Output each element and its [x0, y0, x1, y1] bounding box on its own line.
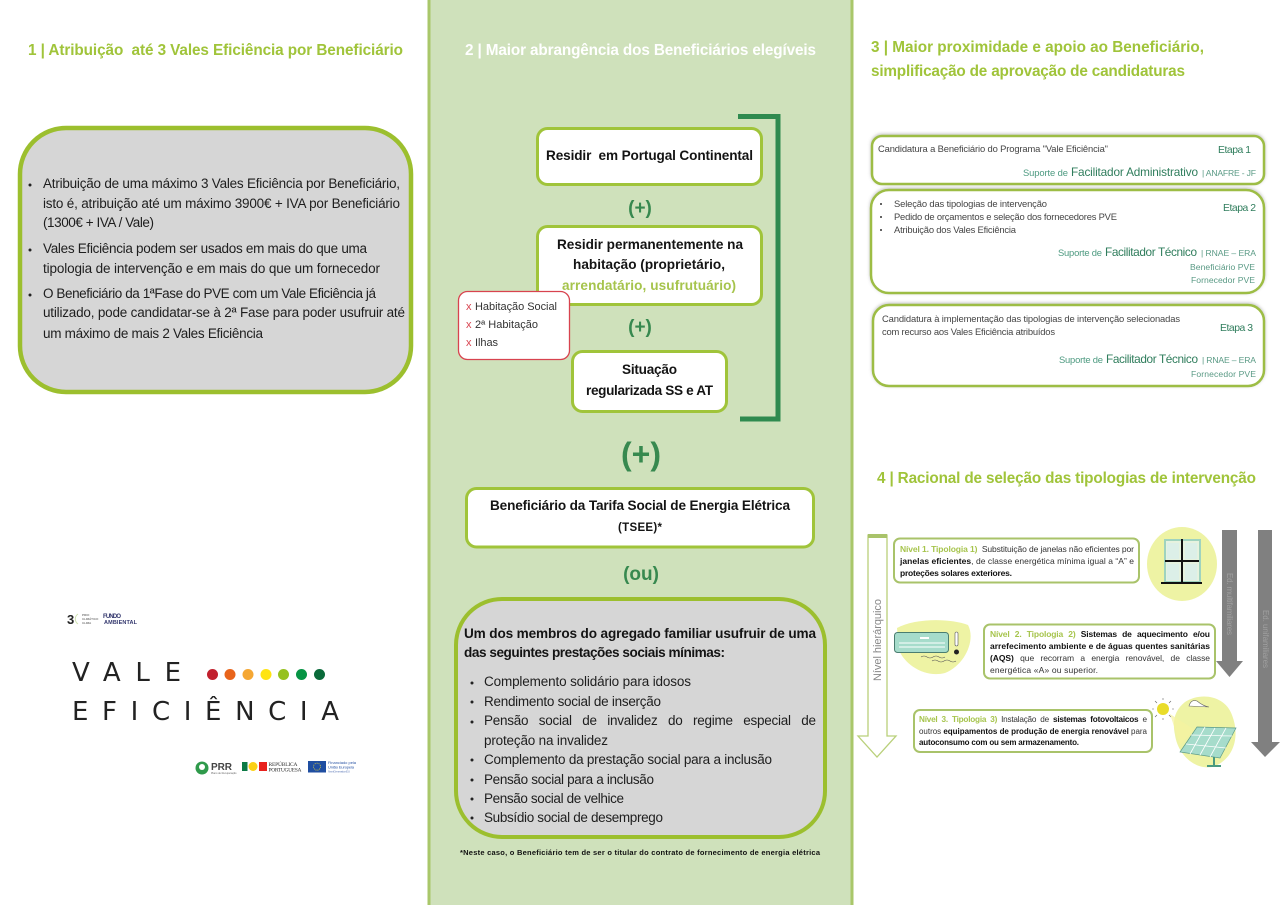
panel: step 1: Facilitador Administrativo [1071, 165, 1198, 179]
panel: level 2 heating: Nível 2. Tipologia 2) Sistemas de aquecimento e/ou [990, 629, 1210, 639]
panel: social benefits: Rendimento social de inserção [484, 694, 661, 709]
criterion: permanent residence: Residir permanentemente na [557, 237, 743, 252]
panel: social benefits: Subsídio social de desemprego [484, 810, 663, 825]
arrow: single-family buildings: Ed. unifamiliares [1261, 610, 1270, 668]
panel: step 2: Seleção das tipologias de intervenção [894, 198, 1047, 209]
panel: step 3: Facilitador Técnico [1106, 352, 1198, 366]
panel: step 2: Facilitador Técnico [1105, 245, 1197, 259]
panel: step 3: Etapa 3 [1220, 323, 1253, 334]
panel: step 1 [872, 136, 1264, 184]
callout: exclusions: Ilhas [475, 337, 498, 349]
panel: level 2 heating [984, 624, 1215, 678]
logo: PRR, República Portuguesa, União Europeia [196, 760, 357, 775]
criterion: regular situation: regularizada SS e AT [586, 383, 714, 398]
criterion: regular situation [572, 352, 726, 412]
panel: social benefits: das seguintes prestações sociais mínimas: [464, 645, 725, 660]
panel: attribution bullets: Vales Eficiência podem ser usados em mais do que uma [43, 241, 367, 256]
callout: exclusions [458, 292, 570, 360]
panel: step 2: | RNAE – ERA [1201, 248, 1256, 258]
panel: attribution bullets: um máximo de mais 2 Vales Eficiência [43, 326, 263, 341]
panel: level 3 solar [914, 710, 1152, 752]
logo: PRR, República Portuguesa, União Europeia: Plano de Recuperação [211, 772, 237, 775]
plus sign: (+) [628, 317, 652, 338]
panel: step 1: Suporte de [1023, 167, 1068, 178]
callout: exclusions: x [466, 319, 472, 331]
arrow: hierarchy level: Nível hierárquico [872, 599, 884, 681]
panel: level 1 windows: Nível 1. Tipologia 1) Substituição de janelas não eficientes por [900, 544, 1134, 554]
icon: air conditioner [894, 620, 971, 674]
panel: step 2 [871, 190, 1264, 293]
logo: PRR, República Portuguesa, União Europeia: PORTUGUESA [268, 768, 302, 774]
panel: step 2: Fornecedor PVE [1191, 275, 1255, 285]
panel: social benefits: Complemento solidário para idosos [484, 674, 691, 689]
callout: exclusions: Habitação Social [475, 301, 557, 313]
panel: attribution bullets: O Beneficiário da 1ªFase do PVE com um Vale Eficiência já [43, 286, 376, 301]
criterion: permanent residence: arrendatário, usufrutuário) [562, 278, 736, 293]
panel: level 2 heating: energética «A» ou superior. [990, 665, 1098, 675]
panel: step 2: Atribuição dos Vales Eficiência [894, 224, 1017, 235]
panel: step 3: Suporte de [1059, 354, 1103, 365]
logo: Fundo Ambiental: FUNDO [103, 614, 121, 620]
heading 3 [871, 39, 1204, 80]
panel: step 2: Etapa 2 [1223, 203, 1256, 214]
heading 3: simplificação de aprovação de candidaturas [871, 63, 1185, 80]
logo: PRR, República Portuguesa, União Europeia: PRR [211, 762, 233, 773]
panel: step 3: Candidatura à implementação das tipologias de intervenção selecionadas [882, 313, 1180, 324]
panel: level 1 windows: proteções solares exteriores. [900, 568, 1012, 578]
panel: social benefits: Complemento da prestação social para a inclusão [484, 752, 772, 767]
criterion: permanent residence [538, 226, 762, 304]
criterion: regular situation: Situação [622, 362, 677, 377]
callout: exclusions: 2ª Habitação [475, 319, 538, 331]
panel: step 3: | RNAE – ERA [1202, 355, 1256, 365]
panel: attribution bullets: Atribuição de uma máximo 3 Vales Eficiência por Beneficiário, [43, 176, 400, 191]
panel: step 2: Beneficiário PVE [1190, 262, 1255, 272]
heading 2: 2 | Maior abrangência dos Beneficiários elegíveis [465, 42, 816, 59]
big plus sign: (+) [621, 436, 661, 472]
criterion: permanent residence: habitação (proprietário, [573, 257, 725, 272]
panel: attribution bullets: (1300€ + IVA / Vale) [43, 215, 154, 230]
panel: step 3: Fornecedor PVE [1191, 369, 1256, 379]
panel: level 1 windows [894, 538, 1139, 582]
panel: social benefits: Pensão social para a inclusão [484, 772, 654, 787]
heading 1: 1 | Atribuição até 3 Vales Eficiência por Beneficiário [28, 42, 403, 59]
heading 4: 4 | Racional de seleção das tipologias de intervenção [877, 470, 1256, 487]
panel: level 3 solar: outros equipamentos de produção de energia renovável para [919, 727, 1148, 736]
criterion: TSEE [466, 488, 814, 547]
logo: Fundo Ambiental: CLIMÁTICO [82, 617, 99, 621]
bracket [738, 116, 778, 419]
logo: Fundo Ambiental [67, 612, 138, 627]
panel: social benefits: Um dos membros do agregado familiar usufruir de uma [464, 626, 816, 641]
criterion: TSEE: (TSEE)* [618, 522, 663, 534]
logo: Fundo Ambiental: PRIO [82, 613, 90, 617]
arrow: single-family buildings [1251, 530, 1280, 757]
panel: central column background [429, 0, 852, 905]
panel: social benefits [456, 599, 825, 837]
criterion: residence: Residir em Portugal Continental [546, 148, 753, 163]
icon: window [1147, 527, 1217, 601]
panel: step 3 [873, 305, 1264, 386]
panel: attribution bullets: tipologia de intervenção e em mais do que um fornecedor [43, 261, 380, 276]
panel: attribution bullets: isto é, atribuição até um máximo 3900€ + IVA por Beneficiário [43, 196, 400, 211]
or label: (ou) [623, 564, 659, 585]
callout: exclusions: x [466, 301, 472, 313]
callout: exclusions: x [466, 337, 472, 349]
logo: Vale Eficiência: VALE [72, 658, 181, 688]
logo: Vale Eficiência: EFICIÊNCIA [72, 695, 339, 727]
heading 3: 3 | Maior proximidade e apoio ao Beneficiário, [871, 39, 1204, 56]
logo: Fundo Ambiental: AMBIENTAL [104, 620, 138, 626]
logo: Vale Eficiência [72, 658, 339, 727]
panel: level 3 solar: Nível 3. Tipologia 3) Instalação de sistemas fotovoltaicos e [919, 715, 1147, 724]
logo: PRR, República Portuguesa, União Europeia: NextGenerationEU [328, 770, 350, 774]
panel: step 2: Suporte de [1058, 247, 1102, 258]
logo: PRR, República Portuguesa, União Europeia: REPÚBLICA [268, 760, 298, 768]
panel: step 1: Candidatura a Beneficiário do Programa "Vale Eficiência" [878, 143, 1108, 154]
logo: Fundo Ambiental: CLIMA [82, 621, 91, 625]
arrow: multi-family buildings [1216, 530, 1243, 677]
panel: attribution bullets [20, 128, 411, 392]
logo: PRR, República Portuguesa, União Europeia: Financiado pela [328, 760, 357, 765]
panel: step 1: | ANAFRE - JF [1202, 168, 1256, 178]
panel: step 3: com recurso aos Vales Eficiência atribuídos [882, 326, 1055, 337]
panel: social benefits: Pensão social de velhice [484, 791, 624, 806]
panel: level 1 windows: janelas eficientes, de classe energética mínima igual a “A” e [899, 556, 1134, 566]
panel: social benefits: proteção na invalidez [484, 733, 608, 748]
panel: step 2: Pedido de orçamentos e seleção dos fornecedores PVE [894, 211, 1117, 222]
logo: Fundo Ambiental: 3 [67, 612, 74, 627]
icon: solar panels [1152, 696, 1236, 767]
panel: level 2 heating: (AQS) que recorram a energia renovável, de classe [990, 653, 1210, 663]
footnote: *Neste caso, o Beneficiário tem de ser o titular do contrato de fornecimento de energia elétrica [460, 848, 821, 857]
arrow: hierarchy level [858, 534, 896, 757]
panel: level 3 solar: autoconsumo com ou sem armazenamento. [919, 738, 1079, 747]
criterion: TSEE: Beneficiário da Tarifa Social de Energia Elétrica [490, 498, 790, 513]
arrow: multi-family buildings: Ed. multifamiliares [1225, 573, 1234, 635]
panel: level 2 heating: arrefecimento ambiente e de águas quentes sanitárias [990, 641, 1210, 651]
criterion: residence [538, 128, 762, 184]
panel: attribution bullets: utilizado, pode candidatar-se à 2ª Fase para poder usufruir até [43, 305, 405, 320]
panel: social benefits: Pensão social de invalidez do regime especial de [484, 713, 816, 728]
logo: PRR, República Portuguesa, União Europeia: União Europeia [328, 764, 355, 770]
panel: step 1: Etapa 1 [1218, 145, 1251, 156]
plus sign: (+) [628, 198, 652, 219]
